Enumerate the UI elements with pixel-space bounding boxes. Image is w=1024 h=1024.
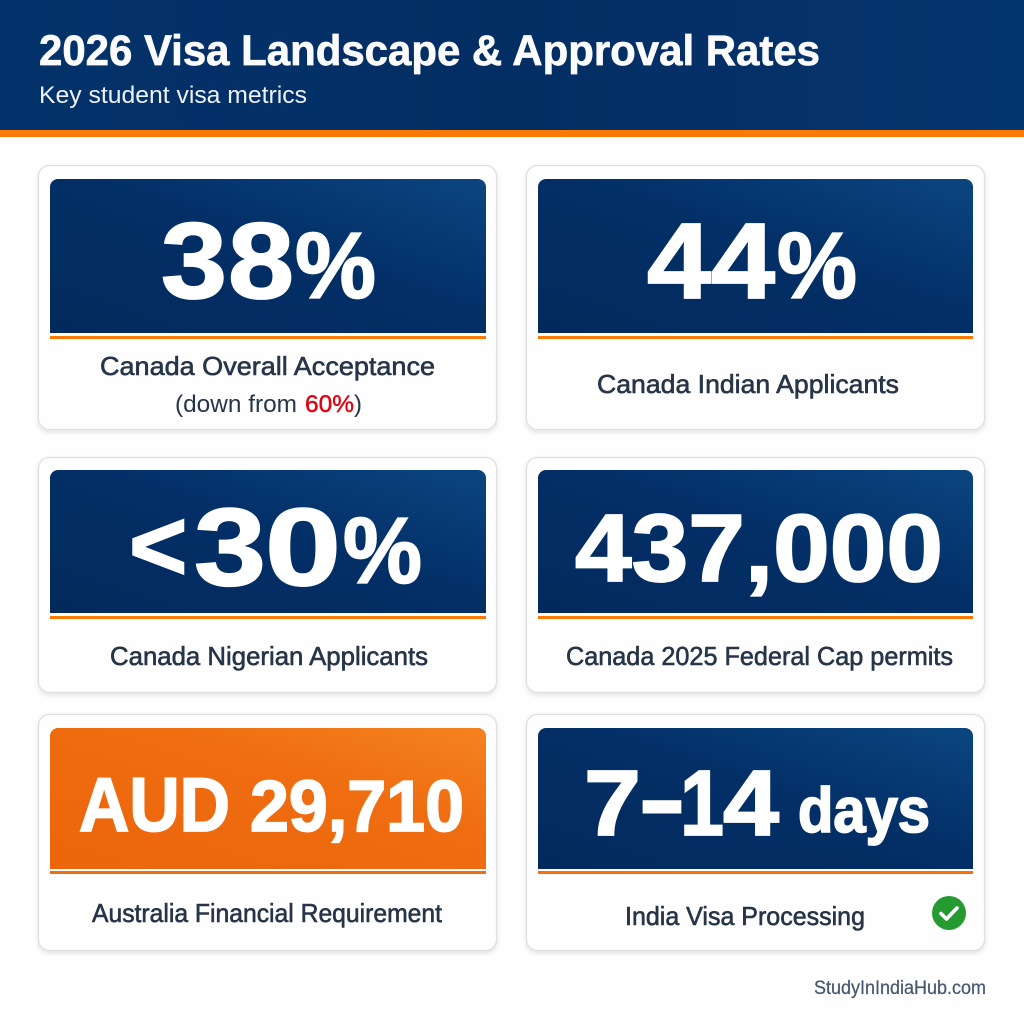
value: <30%: < xyxy=(129,490,187,602)
value: <30% xyxy=(129,486,422,609)
value: AUD 29,710: AUD xyxy=(79,763,230,848)
value: 7–14 days: 7 xyxy=(584,751,641,855)
panel: India visa processing xyxy=(526,714,984,950)
value: 7–14 days: days xyxy=(798,776,930,846)
label: down from 60%: (down from xyxy=(175,391,297,418)
label: Canada Overall Acceptance: Canada Overall Acceptance xyxy=(100,351,435,381)
value: 44% xyxy=(647,200,857,321)
value: 44%: 4 xyxy=(647,200,711,321)
subtitle: Key student visa metrics xyxy=(39,82,307,109)
value: AUD 29,710 xyxy=(79,763,464,848)
icon: green check xyxy=(932,896,966,930)
label: India Visa Processing: India Visa Processing xyxy=(625,901,865,931)
label: Australia Financial Requirement: Australia Financial Requirement xyxy=(92,898,443,928)
label: Canada Nigerian Applicants: Canada Nigerian Applicants xyxy=(110,641,428,671)
value: 437,000: 437,000 xyxy=(575,495,943,602)
value: <30%: 0 xyxy=(265,486,341,609)
value: 7–14 days xyxy=(584,748,930,855)
value: 38%: 3 xyxy=(161,200,227,321)
panel: Canada Nigerian applicants xyxy=(38,458,496,692)
value: 44%: % xyxy=(777,213,857,318)
header banner xyxy=(0,0,1024,137)
value: 38%: % xyxy=(295,213,376,318)
label: down from 60%: ) xyxy=(354,391,362,418)
label: Canada 2025 Federal Cap permits: Canada 2025 Federal Cap permits xyxy=(566,641,953,671)
value: AUD 29,710: 29,710 xyxy=(250,767,464,847)
value: 7–14 days: – xyxy=(642,748,682,852)
value: 7–14 days: 4 xyxy=(723,751,779,855)
label: Canada Indian Applicants: Canada Indian Applicants xyxy=(597,369,899,399)
footer credit: StudyInIndiaHub.com xyxy=(814,978,986,999)
panel: Canada overall acceptance xyxy=(38,166,496,430)
label: down from 60%: 60% xyxy=(305,391,354,418)
value: 38%: 8 xyxy=(228,200,294,321)
value: 7–14 days: 1 xyxy=(680,751,724,855)
label: down from 60% xyxy=(175,391,362,418)
value: 44%: 4 xyxy=(711,200,775,321)
panel: Canada federal cap xyxy=(526,458,984,692)
panel: Australia financial requirement xyxy=(38,714,496,950)
title: 2026 Visa Landscape & Approval Rates xyxy=(39,27,820,75)
value: <30%: % xyxy=(343,498,422,603)
panel: Canada Indian applicants xyxy=(526,166,984,430)
value: <30%: 3 xyxy=(194,486,266,609)
value: 38% xyxy=(161,200,376,321)
